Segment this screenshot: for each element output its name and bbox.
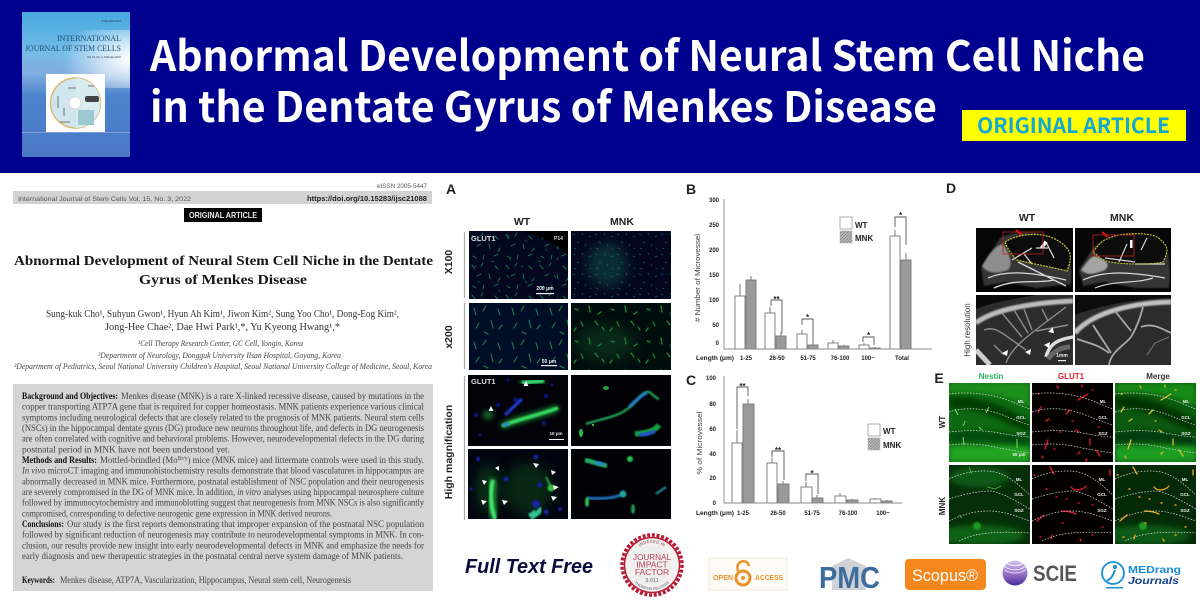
MNK bars: [743, 404, 892, 503]
panel C: bar chart percent of microvessels: 100: [706, 376, 717, 382]
panel B: bar chart number of microvessels: B: [686, 181, 696, 197]
micrograph: WT x100: P14: [554, 236, 563, 242]
icon: SCIE logo: SCIE: [1033, 561, 1077, 586]
abstract box: followed by significant reduction of neurogenesis may contribute to neurodevelopmental symptoms in MNK. In con-: [22, 530, 424, 541]
image: MNK GLUT1: ML: [1099, 477, 1105, 482]
journal info bar: https://doi.org/10.15283/ijsc21088: [307, 196, 427, 203]
icon: journal impact factor seal: JOURNAL: [633, 552, 671, 562]
icon: open access: ACCESS: [755, 575, 783, 582]
journal cover: [22, 12, 130, 157]
panel C: bar chart percent of microvessels: 60: [709, 427, 717, 433]
micrograph: MNK high magnification 1: [571, 375, 671, 446]
panel C: bar chart percent of microvessels: 26-50: [770, 511, 786, 517]
image: MNK Nestin: ML: [1016, 477, 1022, 482]
panel B: bar chart number of microvessels: 200: [709, 248, 720, 254]
journal info bar: International Journal of Stem Cells Vol. 15, No. 3, 2022: [18, 196, 191, 203]
title: in the Dentate Gyrus of Menkes Disease: [150, 74, 937, 135]
abstract box: postnatal period in MNK have not been understood yet.: [22, 444, 230, 455]
icon: open access: OPEN: [713, 575, 733, 582]
panel B: bar chart number of microvessels: 50: [712, 323, 720, 329]
image: MNK Merge: SGZ: [1180, 508, 1190, 513]
title: [149, 23, 1145, 135]
abstract box: [13, 384, 433, 591]
micrograph: WT x100: GLUT1: [471, 234, 496, 243]
abstract box: early diagnosis and new therapeutic strategies in the postnatal central nerve system damage of MNK patients.: [22, 551, 403, 562]
panel B: bar chart number of microvessels: 26-50: [769, 356, 785, 362]
icon: journal impact factor seal: [620, 533, 684, 597]
panel B: bar chart number of microvessels: 1-25: [740, 356, 753, 362]
micrograph: WT x100: [469, 231, 568, 299]
error bars: [737, 399, 887, 501]
panel B: bar chart number of microvessels: *: [867, 331, 871, 340]
image: WT Nestin: ML: [1018, 399, 1024, 404]
icon: Scopus logo: Scopus®: [912, 566, 978, 585]
panel B: bar chart number of microvessels: 76-100: [831, 356, 850, 362]
header banner: [0, 0, 1200, 173]
panel C: bar chart percent of microvessels: 80: [709, 402, 717, 408]
panel D: microCT images: High resolution: [963, 303, 972, 357]
abstract box: copper transporting ATP7A gene that is required for copper homeostasis. MNK patients experience various clinical: [22, 402, 424, 413]
affiliations: [14, 339, 432, 371]
abstract box: symptoms including neurological defects that are closely related to the prognosis of MNK patients. Neural stem cells: [22, 412, 424, 423]
legend: MNK: [883, 441, 901, 450]
abstract box: In vivo microCT imaging and immunohistochemistry results demonstrate that blood vasculatures in hippocampus are: [21, 466, 424, 477]
panel D: microCT images: [946, 180, 1171, 365]
abstract box: Background and Objectives:: [22, 391, 118, 402]
image: WT GLUT1: ML: [1100, 399, 1106, 404]
abstract box: Methods and Results:: [22, 455, 97, 466]
image: WT GLUT1: GCL: [1098, 415, 1108, 420]
panel B: bar chart number of microvessels: 100: [709, 298, 720, 304]
panel B: bar chart number of microvessels: *: [806, 313, 810, 322]
panel C: bar chart percent of microvessels: 100~: [876, 511, 890, 517]
panel B: bar chart number of microvessels: 0: [716, 341, 720, 347]
panel E: immunofluorescence images: [934, 370, 1196, 545]
panel B: bar chart number of microvessels: *: [899, 211, 903, 220]
panel B: bar chart number of microvessels: # Number of Microvessel: [695, 234, 702, 322]
image: WT GLUT1: [1032, 383, 1113, 462]
micrograph: MNK x200: [571, 303, 671, 370]
panel B: bar chart number of microvessels: 250: [709, 223, 720, 229]
panel D: microCT images: D: [946, 180, 956, 196]
icon: open access: [709, 558, 787, 590]
micrograph: WT x200: 50 μm: [542, 359, 557, 365]
icon: journal impact factor seal: THOMSON REUTERS: [635, 581, 670, 590]
panel A: GLUT1 micrographs: WT: [514, 216, 531, 228]
image: MNK GLUT1: GCL: [1097, 492, 1107, 497]
journal cover: JOURNAL OF STEM CELLS: [25, 43, 121, 53]
panel E: immunofluorescence images: GLUT1: [1058, 372, 1085, 381]
WT bars: [732, 443, 881, 503]
abstract box: compromised, corresponding to defective neurogenic gene expression in MNK derived neurons.: [22, 508, 332, 519]
microCT: MNK high resolution: [1075, 295, 1171, 365]
panel E: immunofluorescence images: MNK: [938, 497, 947, 515]
image: MNK Merge: GCL: [1180, 492, 1190, 497]
image: WT Merge: ML: [1183, 399, 1189, 404]
panel B: bar chart number of microvessels: 150: [709, 273, 720, 279]
panel C: bar chart percent of microvessels: 1-25: [737, 511, 750, 517]
panel C: bar chart percent of microvessels: % of Microvessel: [697, 411, 704, 475]
icon: MEDrang Journals logo: MEDrang: [1128, 565, 1181, 576]
panel C: bar chart percent of microvessels: *: [810, 469, 814, 478]
legend: WT: [883, 427, 896, 436]
micrograph: MNK high magnification 2: [571, 449, 671, 519]
authors: [46, 309, 399, 333]
panel C: bar chart percent of microvessels: 20: [709, 476, 717, 482]
icon: Scopus logo: [905, 559, 986, 590]
image: WT Nestin: SGZ: [1016, 431, 1026, 436]
journal info bar: [13, 183, 432, 204]
image: WT Merge: GCL: [1181, 415, 1191, 420]
legend: [840, 217, 873, 243]
journal cover: INTERNATIONAL: [57, 33, 121, 43]
abstract box: Br/y: [178, 456, 187, 462]
panel A: GLUT1 micrographs: MNK: [610, 216, 634, 228]
full text free label: Full Text Free: [465, 556, 593, 578]
panel A: GLUT1 micrographs: [443, 181, 671, 520]
panel C: bar chart percent of microvessels: 76-100: [839, 511, 858, 517]
panel D: microCT images: MNK: [1110, 212, 1134, 224]
panel B: bar chart number of microvessels: Length (μm): [696, 356, 734, 362]
micrograph: WT x100: 200 μm: [536, 286, 554, 292]
abstract box: Keywords:: [22, 575, 55, 586]
article type tag: ORIGINAL ARTICLE: [189, 211, 258, 220]
abstract box: are often correlated with cognitive and behavioral problems. However, neurodevelopmental defects in the DG during: [22, 434, 424, 445]
image: MNK Nestin: [949, 465, 1030, 544]
panel A: GLUT1 micrographs: x200: [443, 325, 455, 349]
panel B: bar chart number of microvessels: [686, 181, 932, 362]
icon: journal impact factor seal: 3.011: [645, 578, 659, 584]
journal cover: eISSN 2005-5447: [101, 20, 122, 23]
affiliations: ³Department of Pediatrics, Seoul National University Children's Hospital, Seoul National University College of Medicine, Seoul, Korea: [14, 362, 432, 371]
abstract box: clusion, our results provide new insight into early neurodevelopmental defects in MNK and emphasize the needs for: [22, 540, 425, 551]
abstract box: Mottled-brindled (Mo: [100, 455, 184, 466]
affiliations: ¹Cell Therapy Research Center, GC Cell, Yongin, Korea: [138, 339, 303, 348]
panel E: immunofluorescence images: WT: [938, 416, 947, 428]
microCT: MNK whole head: [1075, 228, 1171, 292]
panel B: bar chart number of microvessels: 100~: [861, 356, 875, 362]
article type tag: [184, 208, 262, 222]
image: MNK GLUT1: [1032, 465, 1113, 544]
significance brackets: [737, 387, 818, 494]
image: WT Nestin: 50 μm: [1012, 452, 1026, 457]
abstract box: abnormally decreased in MNK mice. Furthermore, postnatal establishment of NSC population and their neurogenesis: [22, 476, 424, 487]
MNK bars: [746, 260, 911, 349]
panel C: bar chart percent of microvessels: 0: [713, 501, 717, 507]
abstract box: Menkes disease (MNK) is a rare X-linked recessive disease, caused by mutations in the: [121, 391, 424, 402]
icon: MEDrang Journals logo: Journals: [1128, 576, 1180, 587]
image: WT Nestin: GCL: [1016, 415, 1026, 420]
panel B: bar chart number of microvessels: Total: [895, 356, 909, 362]
legend: [868, 424, 901, 450]
image: MNK Merge: [1115, 465, 1196, 544]
icon: MEDrang Journals logo: [1102, 562, 1181, 588]
significance brackets: [771, 217, 906, 345]
image: WT Nestin: [949, 383, 1030, 462]
abstract box: ) mice (MNK mice) and littermate controls were used in this study.: [187, 455, 424, 466]
error bars: [740, 230, 906, 348]
icon: journal impact factor seal: INDEXED IN: [638, 540, 666, 546]
abstract box: (NSCs) in the hippocampal dentate gyrus (DG) produce new neurons throughout life, and defects in DG neurogenesis: [22, 423, 424, 434]
affiliations: ²Department of Neurology, Dongguk University Ilsan Hospital, Goyang, Korea: [98, 351, 341, 360]
panel E: immunofluorescence images: Nestin: [979, 372, 1003, 381]
image: MNK Nestin: GCL: [1014, 492, 1024, 497]
microCT: WT high resolution: 1mm: [1056, 353, 1068, 359]
icon: SCIE logo: [1002, 560, 1077, 586]
icon: journal impact factor seal: IMPACT: [636, 560, 668, 570]
micrograph: WT high magnification 2: [468, 449, 568, 519]
micrograph: WT high magnification 1: [468, 375, 568, 446]
original article badge: ORIGINAL ARTICLE: [977, 110, 1170, 140]
image: WT Merge: SGZ: [1181, 431, 1191, 436]
microCT: WT whole head: [976, 228, 1073, 292]
panel A: GLUT1 micrographs: High magnification: [443, 405, 455, 499]
panel E: immunofluorescence images: Merge: [1146, 372, 1170, 381]
article title: Gyrus of Menkes Disease: [139, 273, 307, 288]
image: MNK Nestin: SGZ: [1014, 508, 1024, 513]
article title: Abnormal Development of Neural Stem Cell Niche in the Dentate: [14, 254, 433, 269]
icon: journal impact factor seal: FACTOR: [635, 567, 669, 577]
icon: PMC logo: PMC: [819, 560, 880, 595]
title: Abnormal Development of Neural Stem Cell Niche: [149, 23, 1145, 84]
article first page panel: [13, 183, 433, 591]
panel B: bar chart number of microvessels: **: [773, 295, 780, 304]
abstract box: Conclusions:: [22, 519, 64, 530]
panel C: bar chart percent of microvessels: 51-75: [804, 511, 820, 517]
panel B: bar chart number of microvessels: 51-75: [800, 356, 816, 362]
panel D: microCT images: WT: [1019, 212, 1036, 224]
panel C: bar chart percent of microvessels: C: [686, 372, 696, 388]
panel C: bar chart percent of microvessels: **: [775, 446, 782, 455]
image: MNK GLUT1: SGZ: [1097, 508, 1107, 513]
authors: Sung-kuk Cho¹, Suhyun Gwon¹, Hyun Ah Kim¹, Jiwon Kim², Sung Yoo Cho¹, Dong-Eog Kim²,: [46, 309, 399, 320]
image: MNK Merge: ML: [1182, 477, 1188, 482]
WT bars: [735, 236, 900, 349]
legend: WT: [855, 221, 868, 230]
image: WT Merge: [1115, 383, 1196, 462]
article title: [14, 254, 433, 288]
panel C: bar chart percent of microvessels: Length (μm): [696, 511, 734, 517]
abstract box: are severely compromised in the DG of MNK mice. In addition, in vitro analyses using hippocampal neurosphere culture: [22, 487, 424, 498]
journal info bar: eISSN 2005-5447: [377, 183, 427, 190]
panel C: bar chart percent of microvessels: **: [739, 382, 746, 391]
micrograph: WT high magnification 1: GLUT1: [471, 377, 496, 386]
panel E: immunofluorescence images: E: [934, 370, 944, 386]
journal cover: Vol. 15, No. 1, February 2022: [87, 55, 122, 59]
panel A: GLUT1 micrographs: A: [446, 181, 456, 197]
authors: Jong-Hee Chae², Dae Hwi Park¹,*, Yu Kyeong Hwang¹,*: [105, 322, 340, 333]
micrograph: WT high magnification 1: 10 μm: [549, 431, 563, 436]
abstract box: Our study is the first reports demonstrating that improper expansion of the postnatal NSC population: [67, 519, 424, 530]
panel C: bar chart percent of microvessels: 40: [709, 452, 717, 458]
micrograph: MNK x100: [571, 231, 671, 299]
micrograph: WT x200: [469, 303, 568, 370]
panel C: bar chart percent of microvessels: [686, 372, 902, 517]
abstract box: followed by immunocytochemistry and immunoblotting suggest that neurogenesis from MNK NSCs is also significantly: [22, 498, 424, 509]
panel B: bar chart number of microvessels: 300: [709, 198, 720, 204]
panel A: GLUT1 micrographs: X100: [443, 250, 455, 274]
legend: MNK: [855, 234, 873, 243]
microCT: WT high resolution: [976, 295, 1073, 365]
image: WT GLUT1: SGZ: [1098, 431, 1108, 436]
abstract box: Menkes disease, ATP7A, Vascularization, Hippocampus, Neural stem cell, Neurogenesis: [60, 575, 351, 586]
